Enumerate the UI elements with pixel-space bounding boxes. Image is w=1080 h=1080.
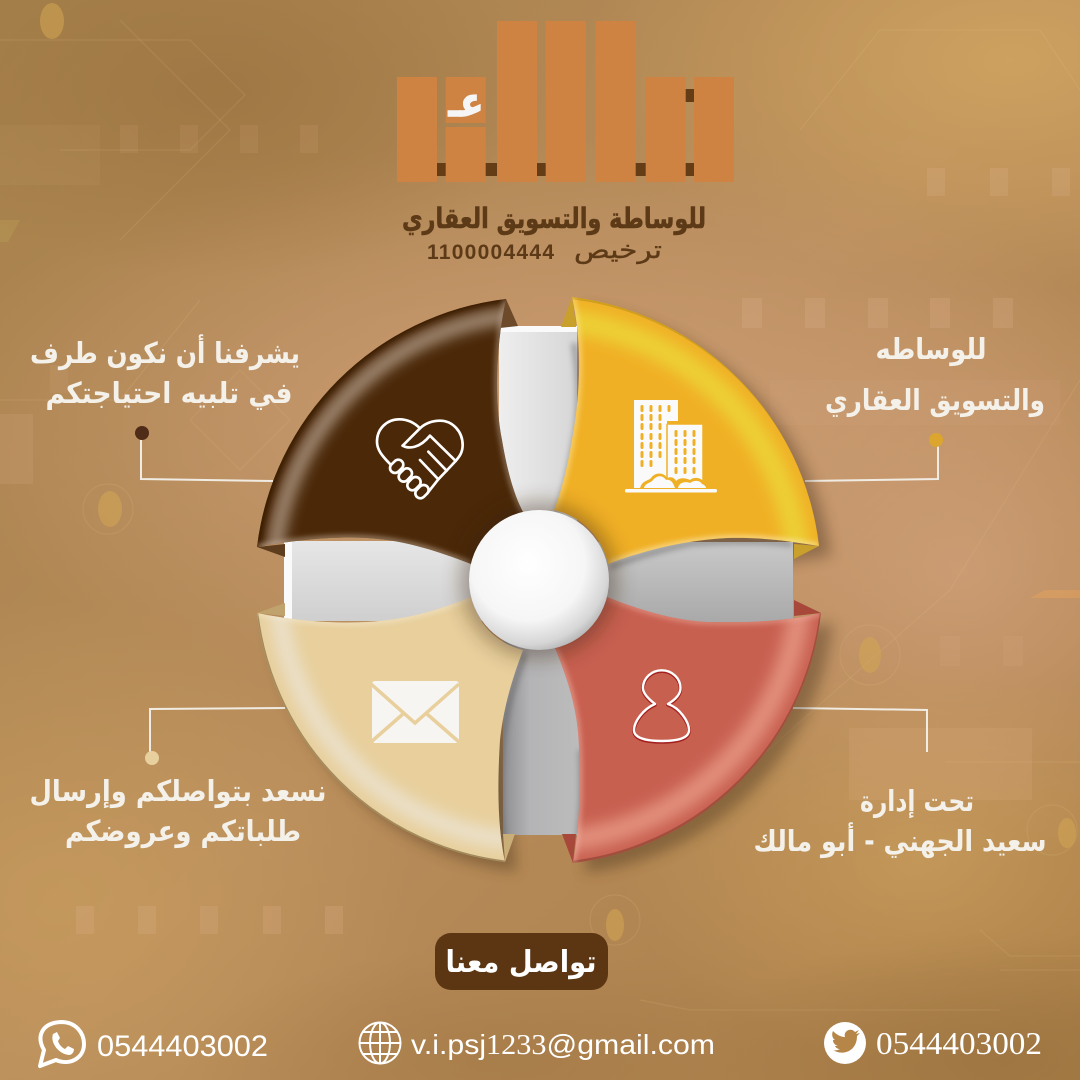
license number (427, 236, 662, 264)
text: bottom left: طلباتكم وعروضكم (65, 814, 301, 848)
petal: red (555, 597, 821, 863)
petal: yellow (554, 297, 819, 564)
text: bottom right: سعيد الجهني - أبو مالك (754, 822, 1046, 858)
text: top right: والتسويق العقاري (825, 383, 1045, 417)
contact: twitter (824, 1022, 1042, 1064)
button: contact us: تواصل معنا (446, 945, 596, 980)
center ball (469, 510, 609, 650)
license number: ترخيص (574, 236, 662, 264)
text: top left: يشرفنا أن نكون طرف (30, 334, 300, 370)
license number: 1100004444 (427, 241, 554, 264)
text: top left (30, 334, 300, 410)
button: contact us (435, 933, 608, 990)
contact: email (360, 1022, 715, 1064)
icon: globe (360, 1022, 400, 1064)
text: bottom right: تحت إدارة (860, 784, 974, 819)
icon: person (634, 670, 689, 742)
icon: handshake heart (377, 419, 463, 500)
text: email address: v.i.psj1233@gmail.com (411, 1029, 715, 1061)
connector: bottom left (145, 708, 285, 765)
icon: envelope (371, 681, 459, 743)
text: top left: في تلبيه احتياجتكم (46, 376, 292, 410)
gray petal: right (590, 542, 793, 622)
petal: brown (257, 299, 523, 564)
central pinwheel diagram (250, 290, 833, 873)
text: twitter number: 0544403002 (876, 1025, 1042, 1061)
cast shadow (269, 307, 833, 873)
company name: للوساطة والتسويق العقاري (402, 202, 706, 235)
petal edge shadows on gray (500, 343, 792, 838)
gray petal: left (284, 541, 484, 621)
contact: whatsapp (40, 1022, 268, 1066)
connector: bottom right (793, 708, 927, 752)
petal folds (257, 297, 821, 863)
petal: cream (257, 597, 523, 862)
text: bottom left: نسعد بتواصلكم وإرسال (30, 774, 326, 809)
icon: whatsapp (40, 1022, 84, 1066)
text: bottom left (30, 774, 326, 848)
text: top right: للوساطه (876, 332, 986, 366)
text: whatsapp number: 0544403002 (97, 1030, 268, 1063)
text: top right (825, 332, 1045, 417)
logo mark (397, 21, 734, 182)
center ball shadow (461, 502, 617, 658)
text: bottom right (754, 784, 1046, 858)
logo mark: عـ (448, 80, 484, 126)
gray petal: top (499, 326, 577, 526)
connector: top right (805, 433, 943, 481)
icon: buildings (625, 400, 717, 492)
gray petal: bottom (503, 636, 580, 835)
connector: top left (135, 426, 273, 481)
icon: twitter (824, 1022, 866, 1064)
